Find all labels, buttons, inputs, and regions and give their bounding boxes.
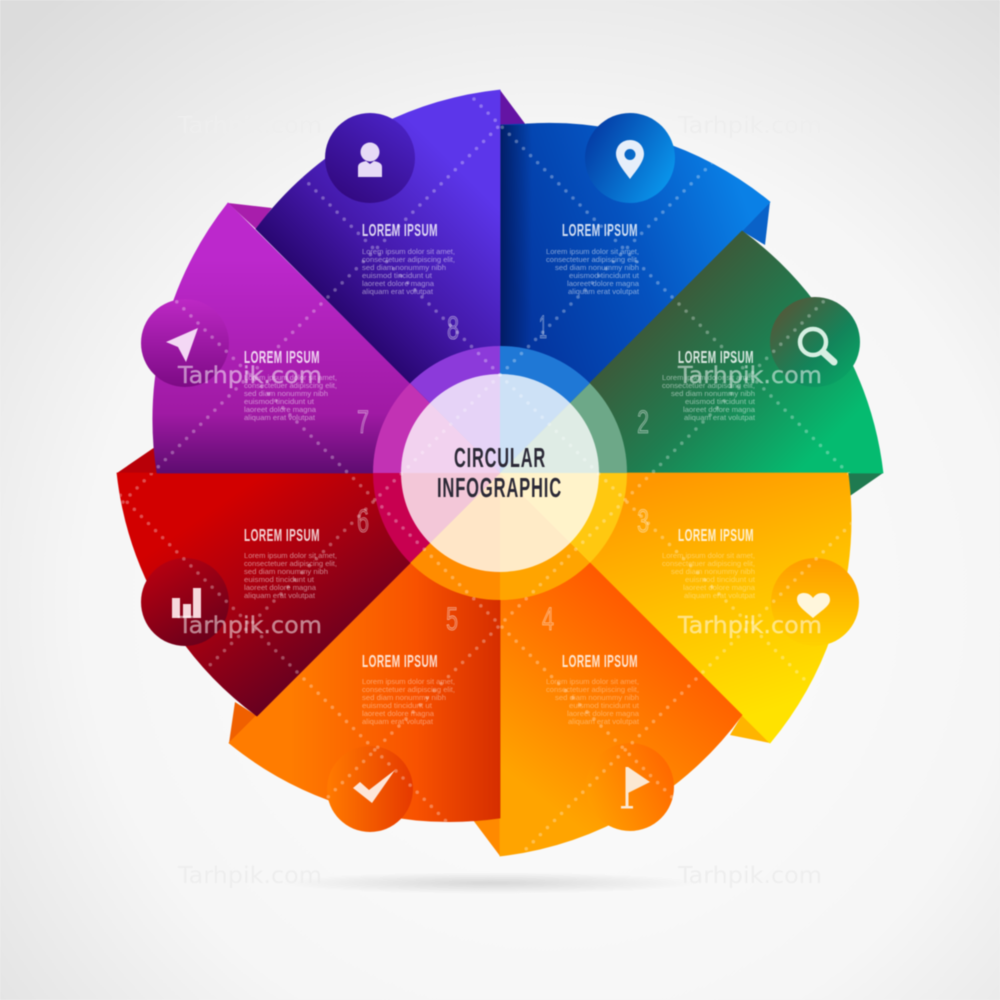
faint watermark text: Tarhpik.com (177, 863, 322, 889)
text block 3: laoreet dolore magna (683, 583, 756, 592)
number 8: 8 (447, 310, 459, 346)
icon: flag (621, 767, 650, 808)
text block 2: sed diam nonummy nibh (671, 389, 755, 398)
title: INFOGRAPHIC (437, 472, 562, 503)
text block 5: Lorem ipsum dolor sit amet, (362, 677, 455, 686)
text block 5: LOREM IPSUM (362, 651, 438, 671)
number 5: 5 (446, 601, 458, 637)
text block 1 (546, 220, 640, 296)
dotted watermark lattice (120, 96, 852, 851)
text block 1: Lorem ipsum dolor sit amet, (546, 247, 639, 256)
text block 3: sed diam nonummy nibh (671, 567, 755, 576)
text block 8: sed diam nonummy nibh (362, 263, 446, 272)
text block 1: consectetuer adipiscing elit, (546, 255, 639, 264)
text block 1: laoreet dolore magna (567, 279, 640, 288)
text block 7: aliquam erat volutpat (244, 413, 315, 422)
segment 1: blue (500, 113, 770, 473)
text block 7: euismod tincidunt ut (244, 397, 314, 406)
text block 2: euismod tincidunt ut (685, 397, 755, 406)
text block 5: aliquam erat volutpat (362, 717, 433, 726)
icon: check mark (353, 770, 395, 803)
text block 8: euismod tincidunt ut (362, 271, 432, 280)
segment 7: magenta (141, 203, 500, 473)
text block 3: aliquam erat volutpat (684, 591, 755, 600)
text block 8: laoreet dolore magna (362, 279, 435, 288)
text block 3: euismod tincidunt ut (685, 575, 755, 584)
watermark text: Tarhpik.com (177, 613, 322, 639)
text block 2: laoreet dolore magna (683, 405, 756, 414)
icon: location pin (616, 140, 644, 179)
text block 7: LOREM IPSUM (244, 347, 320, 367)
text block 2: consectetuer adipiscing elit, (662, 381, 755, 390)
watermark text: Tarhpik.com (177, 363, 322, 389)
center disc (401, 374, 599, 572)
segment 5: deep orange (229, 473, 500, 832)
text block 8 (362, 220, 455, 296)
text block 5 (362, 651, 455, 726)
text block 5: euismod tincidunt ut (362, 701, 432, 710)
text block 8: aliquam erat volutpat (362, 287, 433, 296)
text block 6: sed diam nonummy nibh (244, 567, 328, 576)
watermark text: Tarhpik.com (677, 613, 822, 639)
number 2: 2 (637, 404, 649, 440)
fold: indigo (500, 90, 526, 125)
text: 1 (539, 309, 547, 345)
fold: red (117, 447, 158, 473)
number 7: 7 (357, 404, 369, 440)
text block 6: Lorem ipsum dolor sit amet, (244, 551, 337, 560)
text block 6: euismod tincidunt ut (244, 575, 314, 584)
segment 2: green (500, 231, 883, 473)
text block 1: LOREM IPSUM (562, 220, 638, 240)
text block 3: Lorem ipsum dolor sit amet, (662, 551, 755, 560)
text block 2: LOREM IPSUM (678, 347, 754, 367)
faint watermark text (177, 113, 822, 889)
number 4: 4 (542, 601, 554, 637)
ground shadow (280, 872, 700, 894)
text block 3: LOREM IPSUM (678, 525, 754, 545)
faint watermark text: Tarhpik.com (177, 113, 322, 139)
icon: person (358, 142, 382, 177)
number 3: 3 (637, 503, 649, 539)
text block 7: sed diam nonummy nibh (244, 389, 328, 398)
text block 5: laoreet dolore magna (362, 709, 435, 718)
text block 6: consectetuer adipiscing elit, (244, 559, 337, 568)
segment 4: orange (500, 473, 742, 856)
text block 7: consectetuer adipiscing elit, (244, 381, 337, 390)
watermark text: Tarhpik.com (677, 363, 822, 389)
segment 6: red (117, 473, 500, 716)
text block 4 (546, 651, 640, 726)
text block 6: laoreet dolore magna (244, 583, 317, 592)
text block 5: consectetuer adipiscing elit, (362, 685, 455, 694)
text block 4: laoreet dolore magna (567, 709, 640, 718)
text block 5: sed diam nonummy nibh (362, 693, 446, 702)
text block 6: aliquam erat volutpat (244, 591, 315, 600)
fold: orange four (473, 818, 500, 856)
faint watermark text: Tarhpik.com (677, 863, 822, 889)
text block 7: Lorem ipsum dolor sit amet, (244, 373, 337, 382)
title (437, 442, 562, 503)
fold: green (843, 473, 883, 498)
icon: paper plane (166, 328, 198, 362)
text block 2: aliquam erat volutpat (684, 413, 755, 422)
text block 8: LOREM IPSUM (362, 220, 438, 240)
text block 1: euismod tincidunt ut (569, 271, 639, 280)
text block 3 (662, 525, 756, 600)
title: CIRCULAR (454, 442, 546, 473)
text block 8: Lorem ipsum dolor sit amet, (362, 247, 455, 256)
segment 8: indigo (256, 90, 500, 473)
text block 7 (244, 347, 337, 422)
text block 1: sed diam nonummy nibh (555, 263, 639, 272)
fold: orange five (229, 702, 257, 743)
icon: heart (797, 593, 830, 618)
text block 2 (662, 347, 756, 422)
text block 4: Lorem ipsum dolor sit amet, (546, 677, 639, 686)
text block 6 (244, 525, 337, 600)
text block 7: laoreet dolore magna (244, 405, 317, 414)
text block 1: aliquam erat volutpat (568, 287, 639, 296)
text block 4: aliquam erat volutpat (568, 717, 639, 726)
text block 8: consectetuer adipiscing elit, (362, 255, 455, 264)
text block 4: sed diam nonummy nibh (555, 693, 639, 702)
fold: yellow (730, 715, 770, 743)
text block 2: Lorem ipsum dolor sit amet, (662, 373, 755, 382)
segment 3: yellow (500, 473, 859, 743)
fold: blue (742, 202, 770, 245)
text block 6: LOREM IPSUM (244, 525, 320, 545)
icon: bar chart (172, 588, 201, 618)
text block 3: consectetuer adipiscing elit, (662, 559, 755, 568)
watermark text (177, 363, 822, 639)
faint watermark text: Tarhpik.com (677, 113, 822, 139)
icon: magnifier (800, 329, 834, 362)
center ring (373, 346, 627, 600)
number 6: 6 (357, 503, 369, 539)
text block 4: euismod tincidunt ut (569, 701, 639, 710)
text block 4: consectetuer adipiscing elit, (546, 685, 639, 694)
text block 4: LOREM IPSUM (562, 651, 638, 671)
fold: magenta (228, 203, 272, 229)
